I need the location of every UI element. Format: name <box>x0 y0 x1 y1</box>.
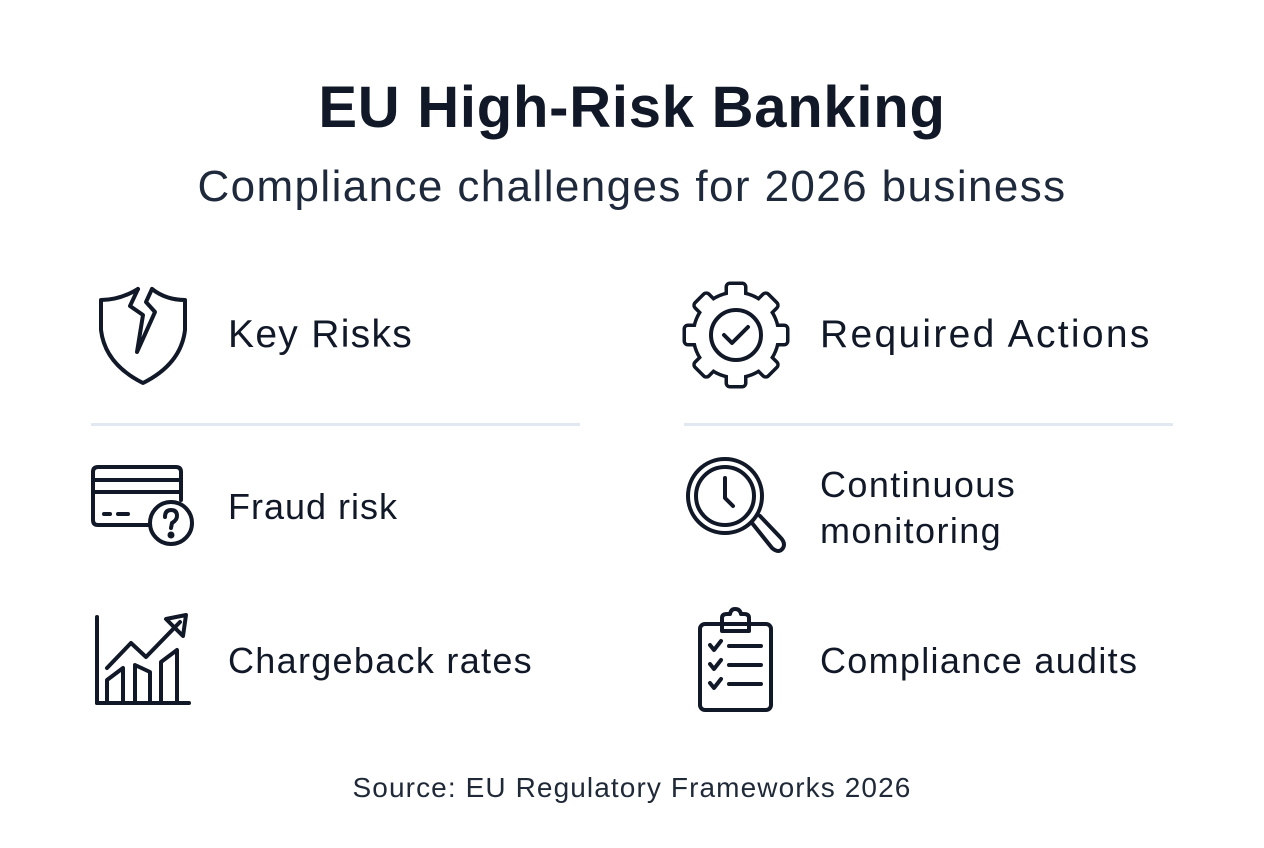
icon: chart with arrow <box>97 615 189 703</box>
item: Continuous monitoring: monitoring <box>820 510 1002 551</box>
item: Compliance audits: Compliance audits <box>820 640 1138 681</box>
icon: card with question <box>93 467 192 544</box>
icon: clipboard checklist <box>700 609 771 710</box>
heading: Key Risks: Key Risks <box>228 313 413 356</box>
item: Fraud risk: Fraud risk <box>228 486 398 527</box>
item: Continuous monitoring: Continuous <box>820 464 1016 505</box>
subtitle: Compliance challenges for 2026 business <box>197 162 1067 211</box>
divider right <box>684 423 1173 426</box>
item: Continuous monitoring <box>820 464 1016 551</box>
icon: broken shield <box>101 289 185 383</box>
heading: Required Actions: Required Actions <box>820 313 1152 356</box>
title: EU High-Risk Banking <box>318 75 946 140</box>
source: Source: EU Regulatory Frameworks 2026 <box>353 772 911 803</box>
item: Chargeback rates: Chargeback rates <box>228 640 533 681</box>
icon: gear with check <box>686 285 786 385</box>
icon: magnifier with clock <box>688 459 784 551</box>
divider left <box>91 423 580 426</box>
